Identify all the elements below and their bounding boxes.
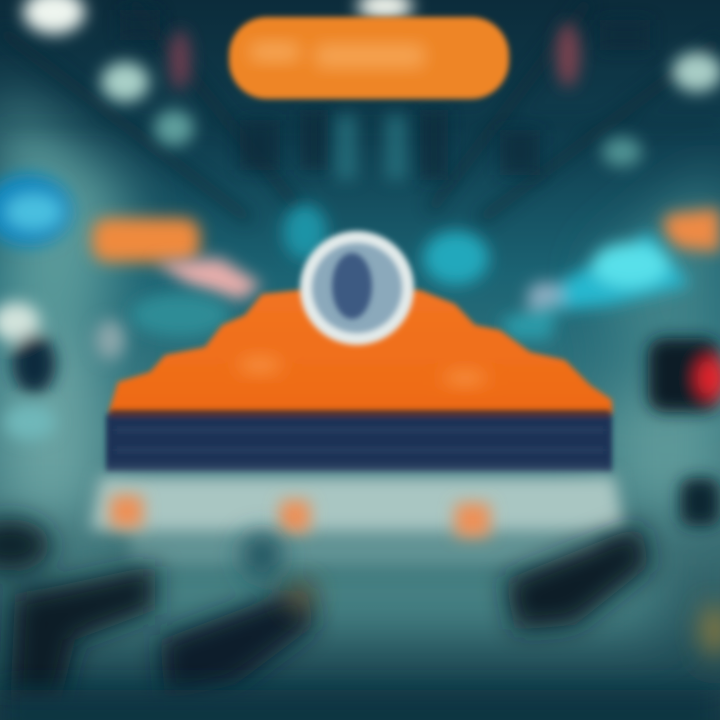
- pale content panel: [90, 476, 625, 565]
- background: ambient light areas: [0, 90, 720, 630]
- ceiling lights: [23, 0, 720, 167]
- left orange label: [92, 218, 200, 262]
- right side red light: [648, 338, 720, 526]
- left blue glow: [0, 174, 72, 246]
- right orange label: [664, 208, 720, 252]
- cyan shapes near circle: [130, 204, 489, 337]
- bottom shade: [0, 582, 720, 720]
- pink connector ribbon: [155, 258, 262, 300]
- ceiling beams: [0, 0, 720, 220]
- dark navy band: [106, 410, 612, 472]
- left side dark device: [0, 302, 125, 440]
- top orange banner: [229, 17, 509, 99]
- ceiling light columns: [335, 115, 407, 180]
- ceiling panels: [120, 10, 650, 180]
- lower dark shapes: [0, 519, 650, 705]
- circular badge: [300, 231, 414, 345]
- orange mountain shape: [110, 290, 612, 414]
- right cyan glow: [500, 232, 690, 340]
- orange panel markers: [110, 495, 490, 537]
